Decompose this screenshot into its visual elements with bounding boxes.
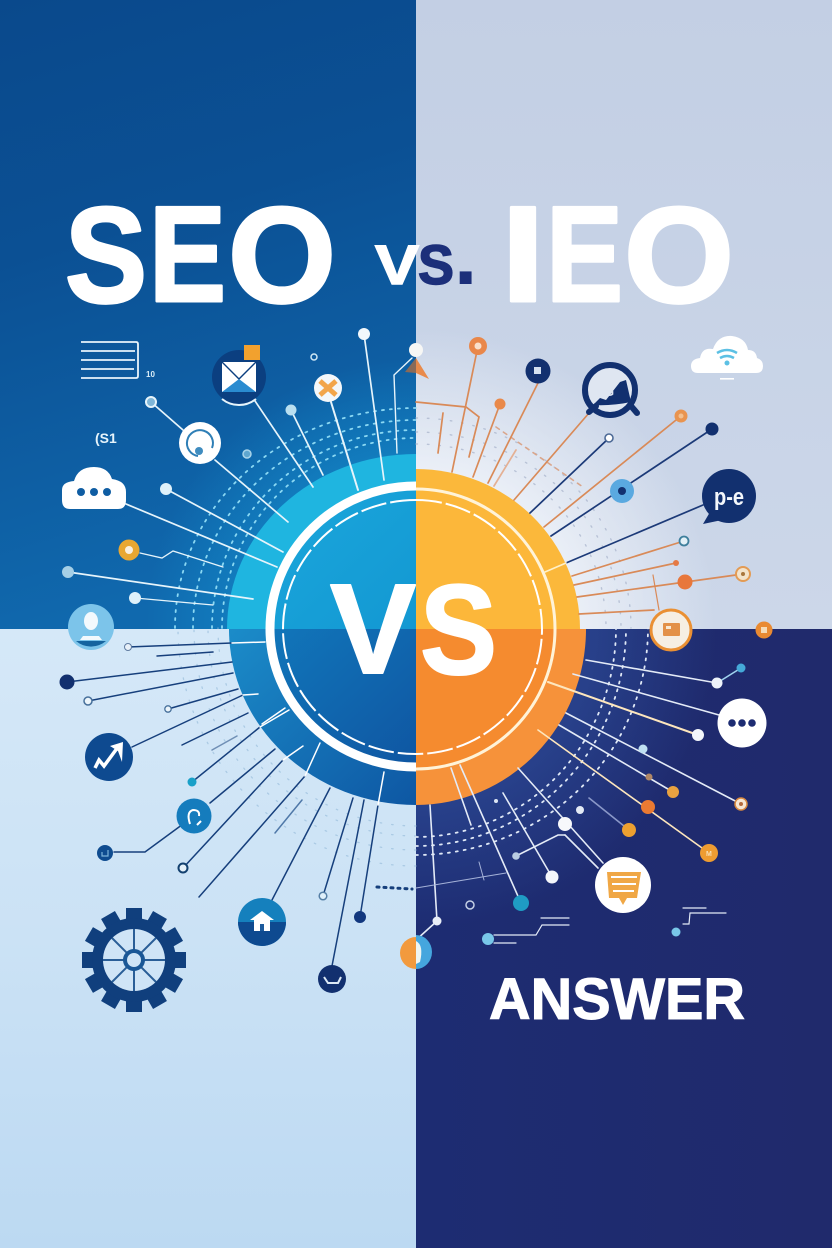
icon: refresh circle bbox=[179, 422, 221, 464]
icon: white node lower bbox=[546, 870, 558, 884]
icon: ring end bbox=[735, 798, 747, 810]
panel: top-left SEO background bbox=[0, 0, 416, 629]
icon: speech bubble bbox=[702, 469, 756, 524]
white ring bbox=[270, 486, 555, 769]
icon: wifi cloud bbox=[691, 336, 763, 380]
icon: orange ring node top right bbox=[469, 337, 487, 355]
icon: small dot bbox=[494, 799, 498, 803]
title word: vs.: V bbox=[375, 233, 419, 296]
icon: growth arrow badge bbox=[85, 733, 133, 781]
disc outer quadrants bbox=[227, 454, 586, 805]
dashed orbit arcs bbox=[175, 408, 648, 866]
icon: white dot with sky dot bbox=[712, 664, 746, 688]
icon: home badge bbox=[238, 898, 286, 946]
disc text: VS bbox=[330, 558, 497, 702]
icon: orange dot mid bbox=[678, 574, 692, 590]
icon: headset badge bbox=[176, 798, 212, 834]
icon: white node top bbox=[358, 328, 370, 340]
title word: vs.: S bbox=[418, 233, 454, 296]
icon: hollow ring bottom bbox=[319, 892, 327, 900]
title word: IEO bbox=[501, 178, 734, 331]
icon: navy dot left bbox=[60, 674, 74, 690]
title word: SEO: E bbox=[149, 178, 226, 330]
icon: white navy ring bbox=[605, 434, 613, 442]
icon: half-circle node bbox=[124, 644, 132, 650]
icon: magnifier ring: G bbox=[604, 384, 614, 399]
icon: orange ring right bbox=[736, 567, 750, 581]
icon: teal dot bbox=[188, 778, 196, 786]
icon: sky node bbox=[482, 933, 494, 945]
icon: navy dot bottom bbox=[354, 911, 366, 923]
dashed inner ring bbox=[283, 500, 542, 754]
icon: navy dot bbox=[706, 422, 718, 436]
icon: navy badge bbox=[526, 358, 550, 384]
icon: card badge bbox=[651, 610, 691, 650]
title word: SEO bbox=[65, 178, 336, 331]
icon: pin on divider bbox=[405, 343, 429, 379]
icon: hollow ring small bbox=[165, 706, 171, 712]
icon: amber dot bbox=[622, 823, 636, 837]
icon: pale small mark bbox=[576, 806, 584, 814]
icon: teal node bbox=[513, 895, 529, 911]
icon: small ring node bbox=[146, 397, 156, 407]
icon: orange dot bbox=[494, 398, 506, 410]
icon: amber node bbox=[667, 786, 679, 798]
title word: IEO: I bbox=[501, 178, 545, 330]
icon: hollow ring left bbox=[84, 697, 92, 705]
panel: bottom-right navy background bbox=[416, 629, 832, 1248]
disc text: VS: S bbox=[420, 559, 497, 702]
chart: central VS disc bbox=[227, 454, 586, 805]
icon: small check badge bbox=[97, 845, 113, 861]
icon: pale ring node bbox=[680, 536, 688, 546]
icon: hollow ring lower bbox=[178, 864, 188, 872]
icon: amber M badge bbox=[700, 844, 718, 862]
panel: top-right IEO background bbox=[416, 0, 832, 629]
icon: gear bbox=[82, 908, 186, 1012]
label: tiny number: 10 bbox=[146, 370, 155, 379]
icon: tiny orange dot bbox=[673, 560, 679, 566]
icon: white node centre bbox=[558, 817, 572, 831]
panel: bottom-left light background bbox=[0, 629, 416, 1248]
title word: SEO: O bbox=[228, 179, 336, 331]
icon: white node near split bbox=[432, 916, 442, 926]
icon: person avatar bbox=[68, 604, 114, 650]
icon: orange cross badge bbox=[314, 374, 342, 402]
icon: magnifier ring bbox=[585, 365, 637, 415]
disc text: VS: V bbox=[330, 558, 416, 701]
icon: blue node bbox=[610, 479, 634, 503]
connector lines: top-right bbox=[416, 346, 743, 614]
icon: small ring bbox=[311, 354, 317, 360]
connector lines: bottom-right bbox=[416, 660, 741, 943]
icon: list shield badge bbox=[595, 857, 651, 913]
icon: pale node lower bbox=[512, 852, 520, 860]
icon: pale node 2 bbox=[129, 592, 141, 604]
title word: IEO: O bbox=[624, 179, 734, 331]
title word: SEO: S bbox=[65, 179, 147, 331]
icon: ellipsis bubble bbox=[718, 698, 766, 748]
icon: small ring 2 bbox=[243, 450, 251, 458]
icon: amber M badge: M bbox=[706, 851, 712, 858]
icon: white node bbox=[160, 483, 172, 495]
icon: split pie node bbox=[400, 935, 432, 969]
title word: IEO: E bbox=[546, 178, 623, 330]
title word: vs. bbox=[375, 208, 477, 302]
title word: vs.: . bbox=[454, 208, 477, 302]
icon: orange small ring bbox=[674, 410, 688, 422]
icon: document list bbox=[81, 342, 138, 378]
icon: orange ring node bbox=[118, 540, 140, 560]
icon: hollow ring dark bbox=[466, 901, 474, 909]
icon: chat cloud bbox=[62, 467, 126, 509]
title: SEO vs. IEO bbox=[65, 178, 734, 331]
label: tiny glyphs: (S1 bbox=[95, 430, 117, 446]
icon: tan node bbox=[646, 774, 652, 780]
icon: sky node right bbox=[672, 928, 680, 936]
icon: speech bubble: p-e bbox=[714, 484, 744, 511]
icon: light node bbox=[638, 744, 648, 754]
icon: small orange badge bbox=[756, 622, 772, 638]
connector lines: top-left bbox=[68, 334, 412, 605]
icon: white node right bbox=[692, 729, 704, 741]
icon: pale node bbox=[62, 566, 74, 578]
disc inner quadrants bbox=[270, 486, 555, 769]
icon: pale node 3 bbox=[286, 404, 296, 416]
label: ANSWER: ANSWER bbox=[489, 967, 745, 1032]
icon: envelope badge bbox=[212, 345, 266, 405]
icon: navy mail badge bbox=[318, 965, 346, 993]
connector lines: bottom-left bbox=[67, 642, 412, 966]
icon: orange node bbox=[641, 800, 655, 814]
